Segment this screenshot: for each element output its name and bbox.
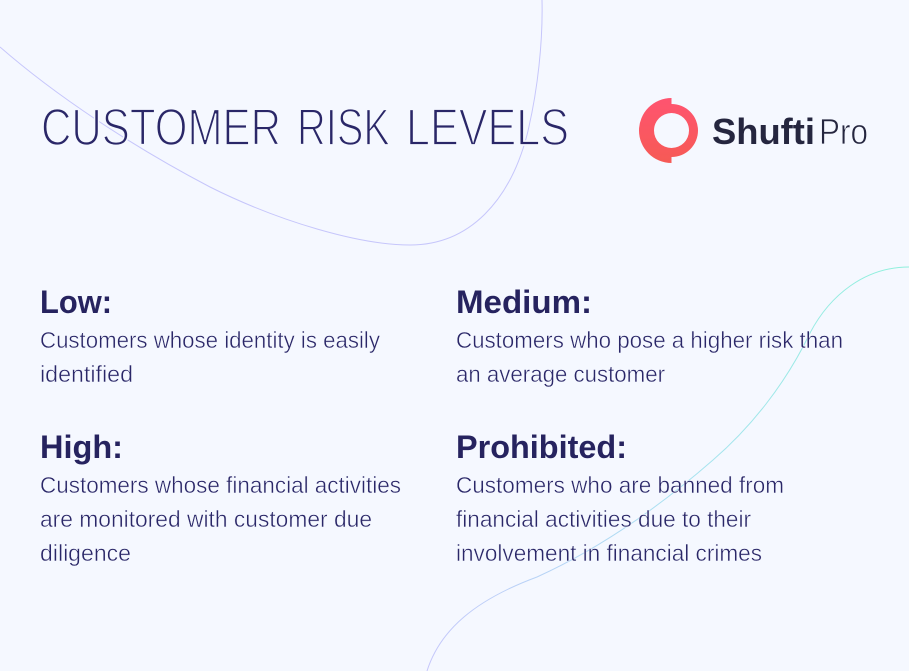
heading: low: Low: [40,284,112,320]
decorative curve: teal and lavender [427,267,909,671]
panel: low [40,284,380,387]
panel: high [40,429,401,566]
logo: Shufti Pro [639,98,868,163]
title: CUSTOMER [41,99,281,157]
text: low description: identified [40,361,133,387]
text: high description: are monitored with customer due [40,506,372,532]
text: high description [40,472,401,566]
text: medium description [456,327,843,387]
decorative curve: top purple [0,0,542,245]
panel: medium [456,284,843,387]
text: medium description: an average customer [456,361,665,387]
heading: high: High: [40,429,123,465]
text: prohibited description: financial activities due to their [456,506,751,532]
text: prohibited description [456,472,784,566]
icon: logo ring [639,98,698,163]
heading: medium: Medium: [456,284,592,320]
text: medium description: Customers who pose a higher risk than [456,327,843,353]
title [41,99,569,157]
text: low description [40,327,380,387]
text: low description: Customers whose identity is easily [40,327,380,353]
text: high description: diligence [40,540,131,566]
title: RISK [297,99,390,157]
text: prohibited description: Customers who are banned from [456,472,784,498]
logo wordmark: Shufti [712,111,815,152]
text: prohibited description: involvement in financial crimes [456,540,762,566]
panel: prohibited [456,429,784,566]
title: LEVELS [406,99,569,157]
logo: Shufti Pro: Pro [819,111,868,152]
text: high description: Customers whose financial activities [40,472,401,498]
heading: prohibited: Prohibited: [456,429,627,465]
